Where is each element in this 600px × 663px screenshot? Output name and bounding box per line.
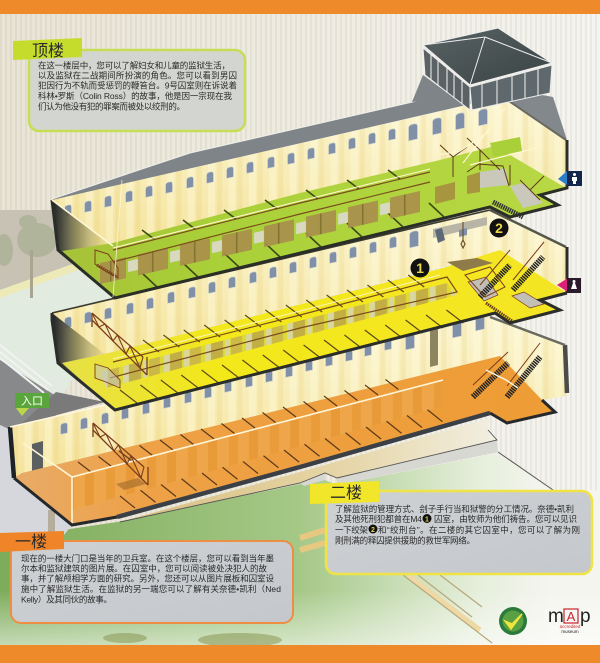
logo: mAP accredited museum: accredited — [560, 624, 581, 629]
text: first floor description: 囚室，由牧师为他们祷告。您可以见识 — [434, 514, 577, 524]
text: top floor description: 们认为他没有犯的罪案而被处以绞刑的。 — [38, 102, 185, 112]
middle floor corridor void — [100, 283, 457, 388]
text: ground floor description: 施中了解监狱生活。在监狱的另一端您可以了解有关奈德•凯利（Ned — [21, 584, 281, 594]
logo: mAP accredited museum: m — [548, 606, 564, 627]
top floor small truss — [95, 250, 118, 278]
ground floor orange floor — [14, 356, 555, 525]
text: ground floor description: 现在的一楼大门口是当年的卫兵室。在这个楼层，您可以看到当年墨 — [21, 554, 274, 564]
heading: top floor — [13, 38, 82, 60]
tree — [0, 215, 57, 298]
cupola mullions — [431, 55, 538, 108]
text: ground floor description: Kelly）及其同伙的故事。 — [21, 594, 112, 604]
top orange band — [0, 0, 600, 14]
text: first floor description — [335, 504, 580, 546]
text: first floor description: 刚刑满的释囚提供援助的救世军网络。 — [335, 536, 475, 546]
cupola — [412, 28, 552, 110]
panel: ground floor — [0, 531, 293, 623]
building at entrance — [0, 345, 105, 540]
middle floor walls — [52, 210, 567, 363]
text: first floor description: 1 — [425, 516, 429, 524]
roof strip — [52, 95, 503, 201]
middle floor left side wall — [52, 313, 115, 410]
top floor railings — [113, 172, 430, 262]
lawn — [0, 453, 600, 645]
ground floor walls — [10, 317, 565, 478]
text: first floor description: 和“绞刑台”。在二楼的其它囚室中，您可以了解为刚 — [378, 525, 580, 535]
text: first floor description: 了解监狱的管理方式、刽子手行当和狱警的分工情况。奈德•凯利 — [335, 504, 574, 514]
ground floor windows — [32, 314, 484, 473]
text: first floor description: 及其他死刑犯都曾在M4 — [335, 514, 422, 524]
marker 2 — [490, 218, 508, 238]
bottom orange band — [0, 645, 600, 663]
sign: female toilet — [557, 278, 581, 293]
ground floor truss stair — [93, 423, 148, 485]
ground floor pedestal — [120, 418, 498, 522]
middle floor edges — [52, 247, 567, 410]
top floor edges — [52, 140, 567, 298]
text: top floor description: 以及监狱在二战期间所扮演的角色。您可以看到男囚 — [38, 70, 237, 80]
top floor left side wall — [52, 200, 115, 298]
middle floor railings — [110, 277, 457, 378]
text: ground floor description — [21, 554, 281, 604]
middle floor gallows beam — [433, 217, 487, 248]
logo: mAP accredited museum: A — [567, 609, 576, 624]
text: top floor description: 犯因行为不轨而受惩罚的鞭笞台。9号囚室则在诉说着 — [38, 80, 237, 90]
panel: first floor — [310, 481, 592, 574]
middle floor truss stair — [92, 313, 147, 375]
cupola left windows — [423, 48, 470, 110]
ground floor — [10, 314, 567, 525]
marker 1 — [410, 258, 430, 278]
middle floor yellow floor — [62, 250, 567, 410]
middle floor small truss — [95, 364, 120, 388]
middle floor windows — [64, 231, 418, 328]
cupola roof — [423, 28, 552, 85]
entrance tag: 入口 — [21, 396, 43, 408]
marker 1: 1 — [416, 260, 424, 276]
logo: mAP accredited museum: museum — [561, 629, 579, 634]
text: first floor description: 2 — [371, 527, 375, 534]
heading: top floor: 顶楼 — [32, 42, 64, 60]
middle floor cell dividers — [120, 275, 463, 403]
middle floor staircases — [465, 242, 544, 321]
garden paths — [300, 452, 553, 643]
top floor green floor — [62, 146, 566, 298]
top floor walls — [52, 97, 566, 250]
text: top floor description: 在这一楼层中，您可以了解妇女和儿童的监狱生活， — [38, 60, 230, 70]
text: ground floor description: 事，并了解颅相学方面的研究。另外，您还可以从图片展板和囚室设 — [21, 574, 274, 584]
heading: first floor — [310, 481, 379, 504]
right roof slope — [505, 90, 567, 140]
top floor stair area — [435, 108, 544, 217]
logo: mAP accredited museum: p — [580, 606, 591, 627]
cupola lower roof — [412, 75, 468, 108]
ground floor cell dividers — [78, 380, 442, 508]
text: first floor description: 一下绞架 — [335, 525, 368, 535]
entrance tag — [15, 393, 49, 416]
heading: ground floor: 一楼 — [15, 533, 47, 551]
tree silhouettes foreground — [103, 633, 282, 647]
marker 2: 2 — [495, 220, 503, 236]
logo: accreditation check — [499, 607, 527, 635]
cupola right windows — [470, 65, 552, 110]
text: top floor description: 科林•罗斯（Colin Ross）的故事，他是因一宗现在我 — [38, 91, 232, 101]
ground floor edges — [14, 400, 555, 525]
lawn lower fade — [0, 590, 600, 645]
heading: ground floor — [0, 531, 64, 552]
ground floor staircases — [473, 343, 540, 397]
top floor cell dividers — [142, 170, 444, 287]
top floor windows — [64, 109, 488, 216]
text: top floor description — [38, 60, 237, 112]
top floor — [52, 90, 567, 298]
top floor corridor void — [100, 191, 420, 284]
panel: top floor — [13, 38, 245, 131]
heading: first floor: 二楼 — [330, 484, 362, 502]
ground floor white outline — [23, 380, 443, 525]
middle floor gallows platform — [447, 258, 493, 271]
sign: male toilet — [558, 171, 582, 186]
ground floor partitions — [72, 380, 443, 510]
text: ground floor description: 尔本和监狱建筑的图片展。在囚室中，您可以阅读被处决犯人的故 — [21, 564, 267, 574]
middle floor — [52, 210, 567, 410]
logo: mAP accredited museum — [548, 606, 591, 634]
